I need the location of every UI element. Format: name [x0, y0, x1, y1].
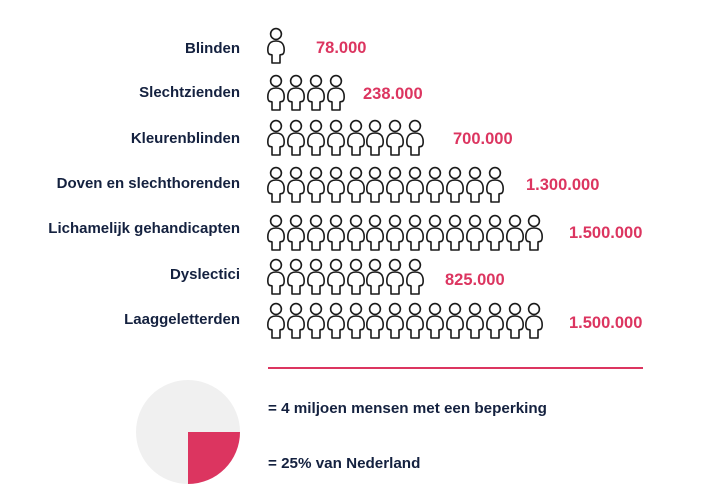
row: Dyslectici — [170, 260, 505, 294]
icons: Kleurenblinden — [268, 121, 423, 155]
icons: Dyslectici — [268, 260, 423, 294]
row: Lichamelijk gehandicapten — [48, 216, 642, 250]
label: Slechtzienden: Slechtzienden — [139, 84, 240, 101]
summary: 25%: = 25% van Nederland — [268, 455, 420, 472]
value: Kleurenblinden: 700.000 — [453, 130, 513, 148]
label: Doven en slechthorenden: Doven en slechthorenden — [57, 175, 240, 192]
pie chart: 25% — [136, 380, 240, 484]
label: Blinden: Blinden — [185, 40, 240, 57]
icons: Lichamelijk gehandicapten — [268, 216, 542, 250]
icons: Slechtzienden — [268, 76, 344, 110]
icons: Blinden — [268, 29, 284, 63]
icons: Doven en slechthorenden — [268, 168, 503, 202]
value: Laaggeletterden: 1.500.000 — [569, 314, 642, 332]
label: Lichamelijk gehandicapten: Lichamelijk gehandicapten — [48, 220, 240, 237]
row: Laaggeletterden — [124, 304, 642, 338]
value: Blinden: 78.000 — [316, 39, 366, 57]
row: Doven en slechthorenden — [57, 168, 599, 202]
value: Lichamelijk gehandicapten: 1.500.000 — [569, 224, 642, 242]
value: Dyslectici: 825.000 — [445, 271, 505, 289]
summary: 4 miljoen: = 4 miljoen mensen met een beperking — [268, 400, 547, 417]
row: Blinden — [185, 29, 366, 63]
row: Slechtzienden — [139, 76, 423, 110]
label: Dyslectici: Dyslectici — [170, 266, 240, 283]
value: Slechtzienden: 238.000 — [363, 85, 423, 103]
icons: Laaggeletterden — [268, 304, 542, 338]
row: Kleurenblinden — [131, 121, 513, 155]
label: Laaggeletterden: Laaggeletterden — [124, 311, 240, 328]
label: Kleurenblinden: Kleurenblinden — [131, 130, 240, 147]
value: Doven en slechthorenden: 1.300.000 — [526, 176, 599, 194]
